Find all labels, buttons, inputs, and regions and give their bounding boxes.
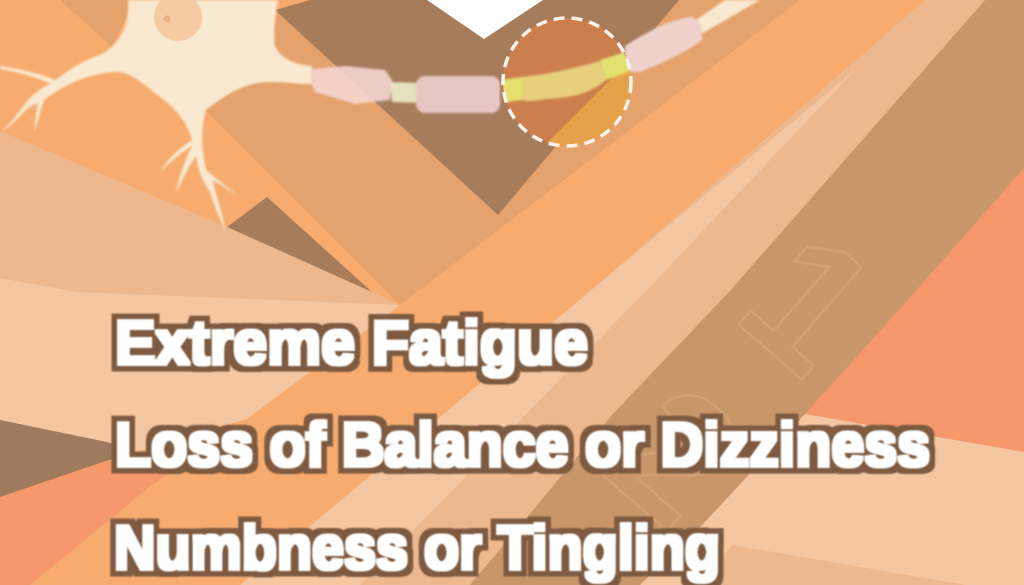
symptom: numbness or tingling: Numbness or Tingling (114, 514, 720, 583)
symptom: loss of balance or dizziness: Loss of Balance or Dizziness (115, 411, 930, 480)
icon: cell nucleus (154, 0, 202, 41)
neuron cell body and dendrites (0, 0, 312, 232)
axon segments (310, 0, 760, 113)
callout: magnified damaged myelin circle (500, 15, 640, 150)
symptom: extreme fatigue: Extreme Fatigue (115, 309, 588, 378)
symptom list (114, 309, 930, 583)
watermark numerals (571, 195, 912, 565)
neuron illustration (0, 0, 760, 232)
icon: white diamond marker (427, 0, 543, 39)
watermark numerals: 2 (571, 348, 779, 565)
watermark numerals: 1 (704, 195, 912, 412)
